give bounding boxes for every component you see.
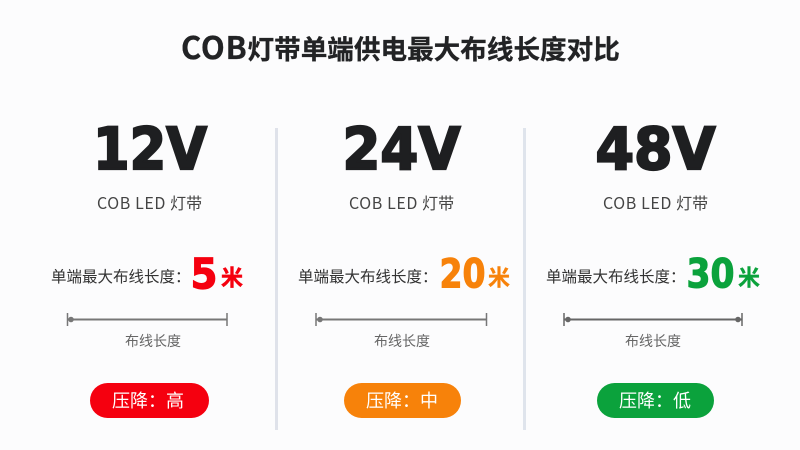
voltage heading: 24V: 24V — [342, 115, 461, 183]
value: 5 米 — [190, 250, 243, 298]
badge: pressure drop high — [90, 383, 209, 418]
max length label: 单端最大布线长度： — [298, 265, 438, 287]
badge: pressure drop low: 压降：低 — [619, 387, 691, 413]
ruler label: 布线长度 — [125, 331, 181, 351]
subtitle: COB LED 灯带 — [97, 190, 202, 214]
voltage heading: 48V: 48V — [596, 115, 716, 183]
badge: pressure drop medium — [344, 383, 461, 418]
badge: pressure drop medium: 压降：中 — [366, 387, 438, 413]
value: 5 米: 米 — [221, 260, 243, 292]
length ruler — [68, 313, 227, 326]
value: 30 米: 米 — [738, 260, 760, 292]
ruler label: 布线长度 — [374, 331, 430, 351]
title: COB灯带单端供电最大布线长度对比 — [181, 23, 620, 68]
length ruler — [564, 313, 742, 326]
value: 30 米: 30 — [686, 252, 734, 298]
length ruler — [316, 313, 486, 326]
badge: pressure drop low — [597, 383, 714, 418]
ruler label: 布线长度 — [625, 331, 681, 351]
max length label: 单端最大布线长度： — [51, 265, 191, 287]
value: 20 米: 20 — [440, 252, 486, 298]
value: 20 米: 米 — [488, 260, 510, 292]
max length label: 单端最大布线长度： — [546, 265, 686, 287]
panel: 24V — [298, 115, 510, 418]
badge: pressure drop high: 压降：高 — [112, 387, 184, 413]
subtitle: COB LED 灯带 — [603, 190, 708, 214]
value: 5 米: 5 — [190, 250, 218, 298]
panel: 12V — [51, 115, 243, 418]
subtitle: COB LED 灯带 — [349, 190, 454, 214]
panel: 48V — [546, 115, 760, 418]
voltage heading: 12V: 12V — [93, 115, 207, 183]
